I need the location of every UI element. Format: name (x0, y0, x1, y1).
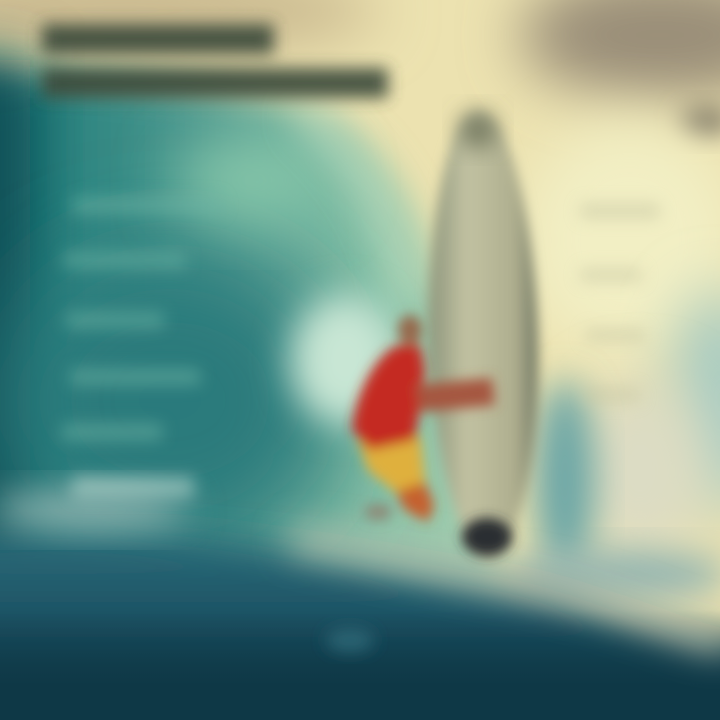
surfer legs (385, 470, 434, 522)
left text list (illegible, blurred) (62, 197, 222, 497)
surfboard (428, 112, 538, 560)
surfer (352, 315, 495, 522)
board nose shadow (460, 112, 496, 148)
surfer head (398, 315, 422, 345)
right text list (illegible, blurred) (580, 203, 660, 402)
right-hand spray (510, 290, 720, 599)
foam band (0, 490, 720, 652)
wave face (0, 60, 510, 640)
sea foreground (0, 533, 720, 720)
surfer arm (415, 378, 495, 412)
title (illegible, blurred) (42, 24, 388, 98)
board tail fin (462, 518, 512, 556)
surfer foot (364, 504, 392, 520)
surfer shorts (358, 436, 425, 492)
surfer torso (352, 345, 425, 450)
